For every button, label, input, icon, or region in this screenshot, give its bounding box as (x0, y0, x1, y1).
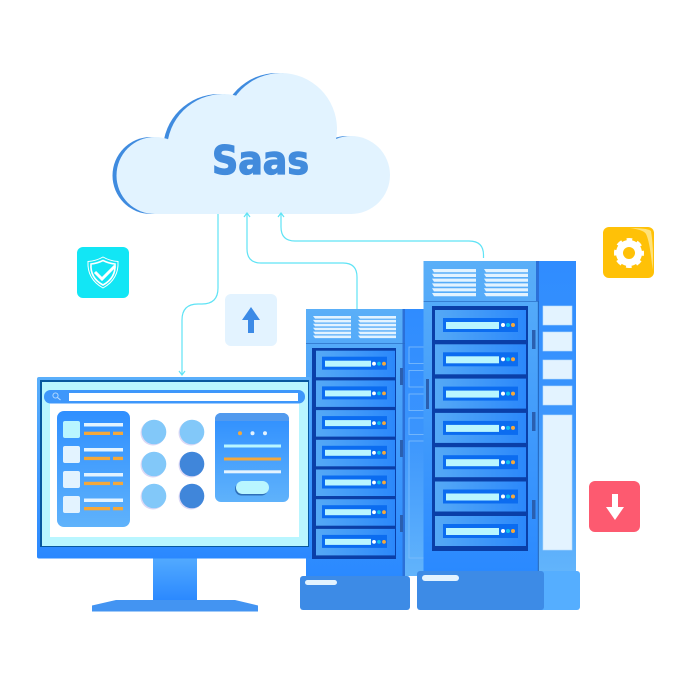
monitor (37, 377, 311, 612)
monitor screen (42, 382, 308, 546)
list card (57, 411, 130, 527)
list row 1 (63, 421, 123, 438)
handles right rack (426, 330, 536, 519)
handles left rack (400, 368, 403, 532)
cloud body (116, 73, 390, 214)
circle grid (140, 420, 204, 510)
server: right rack (424, 261, 576, 572)
vents right rack (432, 269, 528, 296)
base: left rack (300, 576, 410, 610)
monitor base (92, 600, 258, 612)
connector: cloud to monitor (179, 214, 218, 375)
front panel right rack (424, 261, 538, 572)
base: right rack (417, 571, 580, 610)
icon: download arrow (589, 481, 640, 532)
cloud (112, 73, 390, 214)
rack frame right (432, 306, 528, 551)
side panel right rack (538, 261, 576, 571)
rack frame left (312, 348, 396, 559)
side panel labels (543, 306, 572, 550)
search bar (44, 390, 305, 404)
monitor frame (37, 377, 311, 558)
server units left rack (316, 351, 395, 555)
monitor stand (153, 558, 197, 601)
cloud shadow shape (112, 73, 386, 214)
connector: left server to cloud (244, 213, 357, 309)
list row 2 (63, 446, 123, 463)
connector: right server to cloud (278, 213, 484, 258)
icon: shield (77, 247, 129, 298)
list row 3 (63, 471, 123, 488)
icon: settings gear (603, 227, 654, 278)
vents left rack (313, 316, 396, 338)
server: left rack (306, 309, 430, 577)
server units right rack (435, 310, 526, 546)
form card (215, 413, 289, 502)
title: Saas: Saas (212, 139, 309, 184)
side panel left rack (405, 309, 430, 576)
list row 4 (63, 496, 123, 513)
side panel slots (409, 347, 427, 558)
icon: upload arrow (225, 294, 277, 346)
front panel left rack (306, 309, 405, 577)
